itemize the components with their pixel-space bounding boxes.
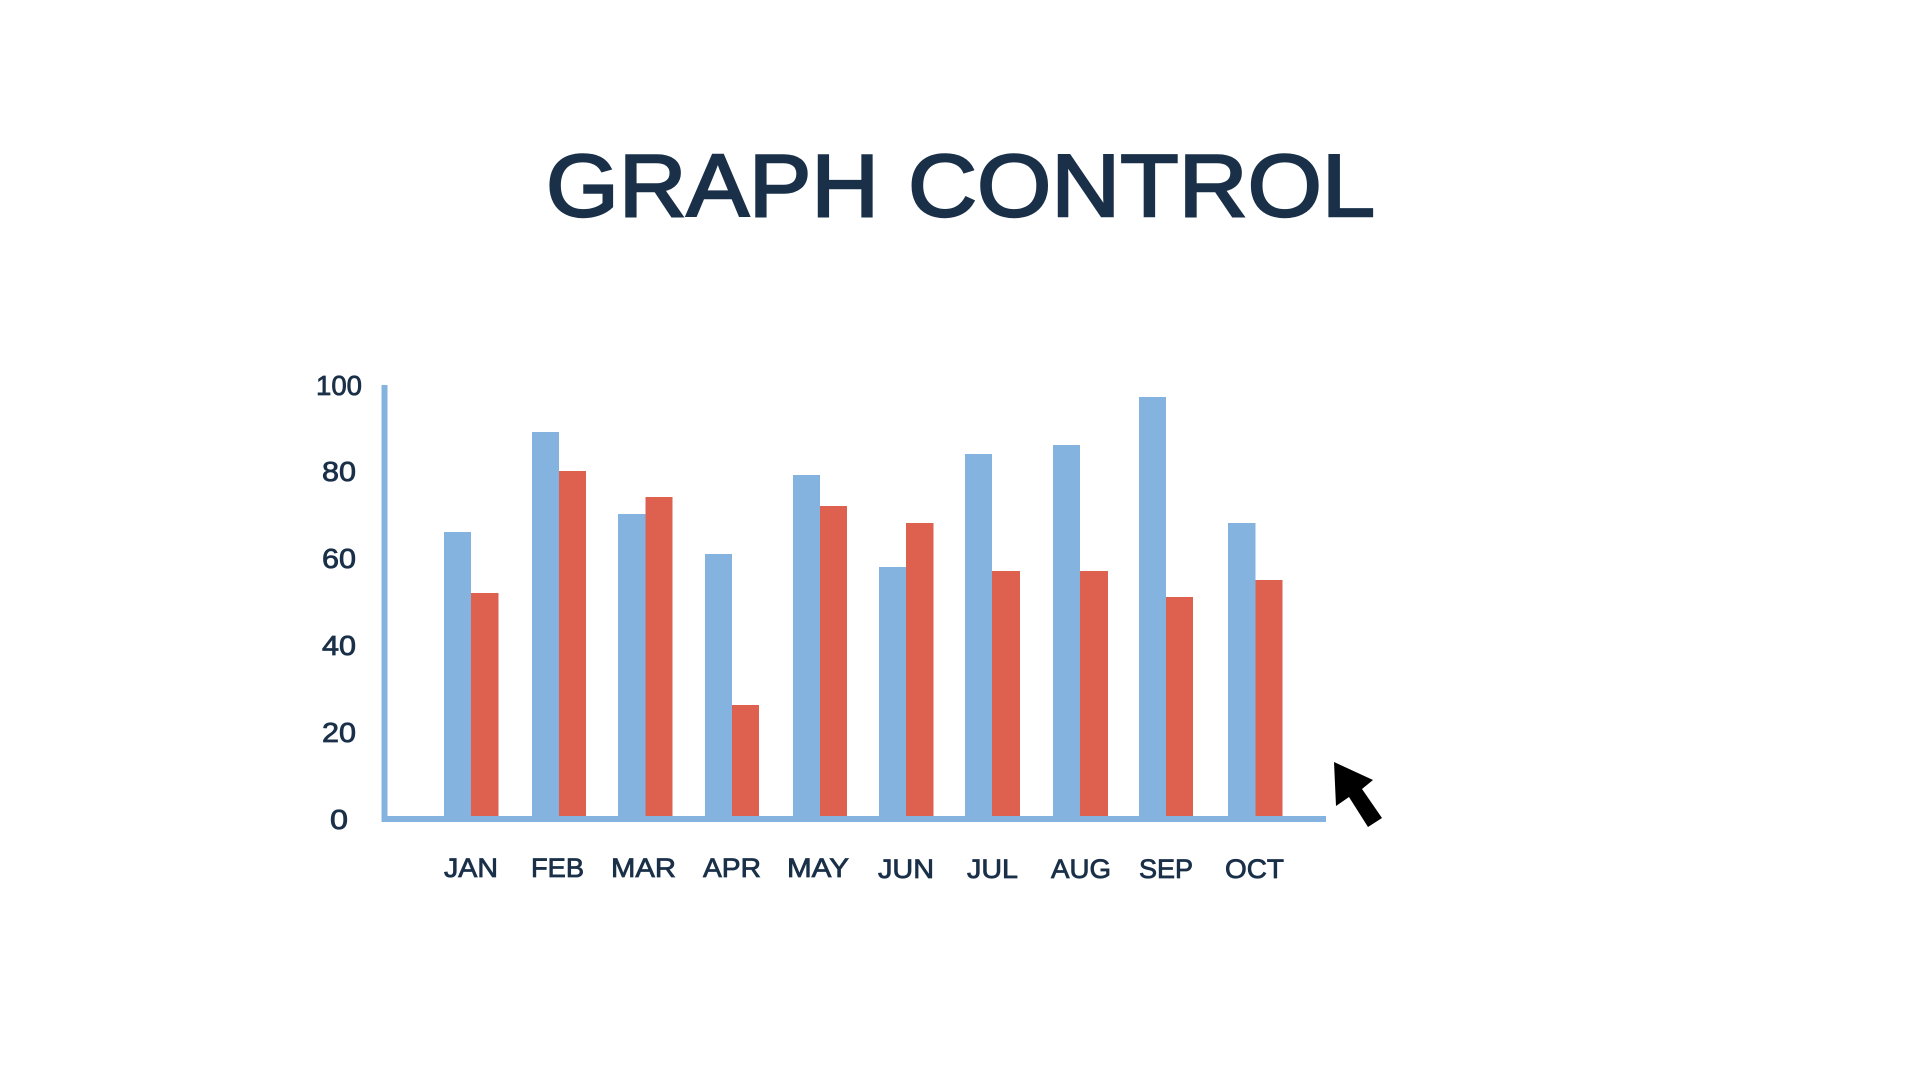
y axis labels: 60 <box>322 543 356 574</box>
x axis month labels: JAN <box>444 853 498 883</box>
y axis labels: 80 <box>322 456 356 487</box>
y axis labels: 100 <box>316 370 362 401</box>
x axis month labels: MAY <box>787 853 849 883</box>
x axis month labels: MAR <box>611 853 676 883</box>
title: GRAPH <box>546 136 879 235</box>
y axis labels <box>316 370 362 835</box>
bars: AUG <box>1053 445 1108 818</box>
bars: OCT <box>1228 523 1282 818</box>
icon: mouse cursor arrow <box>1334 762 1382 827</box>
bar chart <box>316 370 1326 884</box>
axes <box>382 385 1326 822</box>
bars: FEB <box>532 432 586 818</box>
x axis month labels: JUL <box>967 854 1018 884</box>
bars: MAY <box>793 475 847 818</box>
y axis labels: 40 <box>322 630 356 661</box>
x axis month labels: AUG <box>1051 854 1111 884</box>
x axis month labels: FEB <box>531 853 584 883</box>
y axis labels: 20 <box>322 717 356 748</box>
x axis month labels: SEP <box>1139 854 1193 884</box>
bars: JUL <box>965 454 1020 818</box>
bars: APR <box>705 554 759 818</box>
bars: JAN <box>444 532 498 818</box>
bars: MAR <box>618 497 672 818</box>
title: CONTROL <box>908 136 1375 235</box>
x axis month labels: JUN <box>878 854 934 884</box>
title <box>546 136 1375 235</box>
bars: JUN <box>879 523 934 818</box>
y axis labels: 0 <box>330 804 348 835</box>
bars: SEP <box>1139 397 1193 818</box>
x axis month labels: OCT <box>1225 854 1284 884</box>
x axis month labels <box>444 853 1284 884</box>
x axis month labels: APR <box>703 853 761 883</box>
